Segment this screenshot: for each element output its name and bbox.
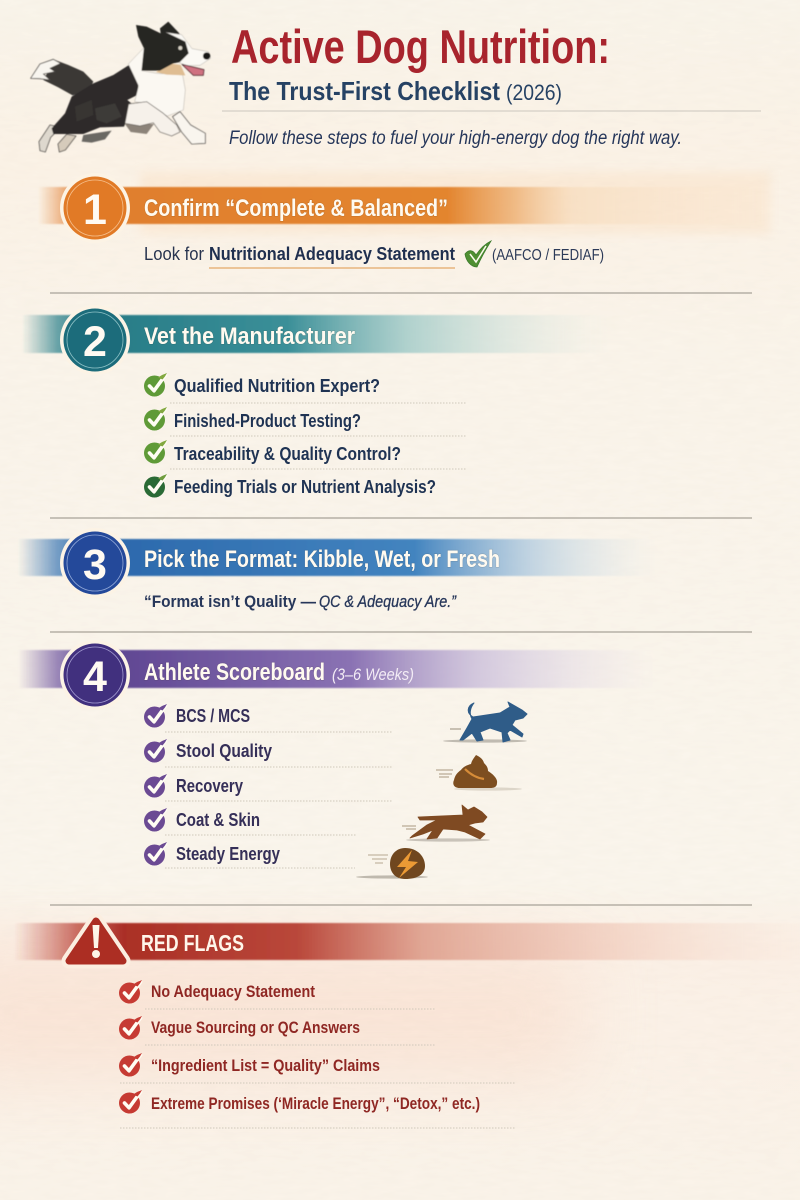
step 4 checklist (144, 704, 393, 868)
red flags list: No Adequacy Statement (151, 982, 315, 1001)
step 4 heading: (3–6 Weeks) (332, 665, 414, 684)
step 1 banner (38, 187, 770, 224)
icon: warning triangle (69, 921, 123, 961)
step 4 heading: Athlete Scoreboard (144, 659, 325, 686)
step 3 heading: Pick the Format: Kibble, Wet, or Fresh (144, 546, 500, 573)
step 4 checklist: Steady Energy (176, 844, 280, 864)
dog head (136, 22, 189, 71)
step 1 heading: Confirm “Complete & Balanced” (144, 195, 448, 222)
step 4 checklist: Stool Quality (176, 741, 272, 761)
dog tail (43, 60, 93, 95)
step 3 badge: 3 (83, 541, 107, 589)
step 3 quote: “Format isn’t Quality — (144, 592, 316, 611)
step 3 quote (144, 592, 457, 611)
step 4 panel (18, 640, 658, 879)
step 1 adequacy line: Nutritional Adequacy Statement (209, 244, 455, 264)
icon: green check (465, 241, 491, 267)
step 1 badge: 1 (83, 186, 107, 234)
step 1 panel (38, 173, 770, 268)
dog belly shadow (125, 124, 154, 134)
dog far front leg (173, 112, 205, 144)
step 4 checklist: BCS / MCS (176, 706, 250, 726)
step 2 badge: 2 (83, 318, 107, 366)
dog near front leg (125, 102, 180, 136)
step 2 checklist (144, 373, 467, 498)
step 2 checklist: Qualified Nutrition Expert? (174, 376, 380, 396)
dog hind legs (39, 125, 61, 152)
red flags list: “Ingredient List = Quality” Claims (151, 1056, 380, 1075)
icon: brown running dog (402, 805, 490, 842)
step 4 checklist: Coat & Skin (176, 810, 260, 830)
red flags heading: RED FLAGS (141, 930, 244, 956)
step 2 panel (22, 305, 612, 498)
step 4 badge (60, 640, 130, 710)
subtitle: (2026) (506, 80, 562, 105)
step 1 adequacy line: (AAFCO / FEDIAF) (492, 247, 604, 264)
icon: blue dog (443, 702, 527, 743)
step 1 adequacy line: Look for (144, 244, 204, 264)
subtitle: The Trust-First Checklist (229, 76, 500, 106)
icon: stool (436, 755, 522, 791)
step 2 heading: Vet the Manufacturer (144, 323, 355, 350)
step 3 quote: QC & Adequacy Are.” (319, 592, 457, 611)
title: Active Dog Nutrition: (231, 20, 610, 73)
step 2 checklist: Finished-Product Testing? (174, 411, 361, 431)
red flags list: Extreme Promises (‘Miracle Energy”, “Detox,” etc.) (151, 1094, 480, 1113)
step 2 badge (60, 305, 130, 375)
red flags panel (14, 921, 800, 1128)
step 2 checklist: Traceability & Quality Control? (174, 444, 401, 464)
step 4 checklist: Recovery (176, 776, 243, 796)
step 3 badge (60, 528, 130, 598)
dog tan patch (156, 63, 185, 75)
step 4 badge: 4 (83, 653, 107, 701)
dog chest (128, 48, 185, 116)
header dog illustration (31, 22, 211, 152)
step 2 checklist: Feeding Trials or Nutrient Analysis? (174, 477, 436, 497)
step 3 panel (18, 528, 658, 611)
step 1 badge (60, 173, 130, 243)
dog white blaze and muzzle (166, 32, 211, 66)
red flags list (119, 980, 516, 1128)
step 1 adequacy line (144, 241, 604, 268)
dog tongue (182, 64, 204, 75)
tagline: Follow these steps to fuel your high-energy dog the right way. (229, 128, 682, 149)
dog body (52, 64, 139, 134)
red flags list: Vague Sourcing or QC Answers (151, 1018, 360, 1037)
icon: energy ball (356, 848, 428, 879)
